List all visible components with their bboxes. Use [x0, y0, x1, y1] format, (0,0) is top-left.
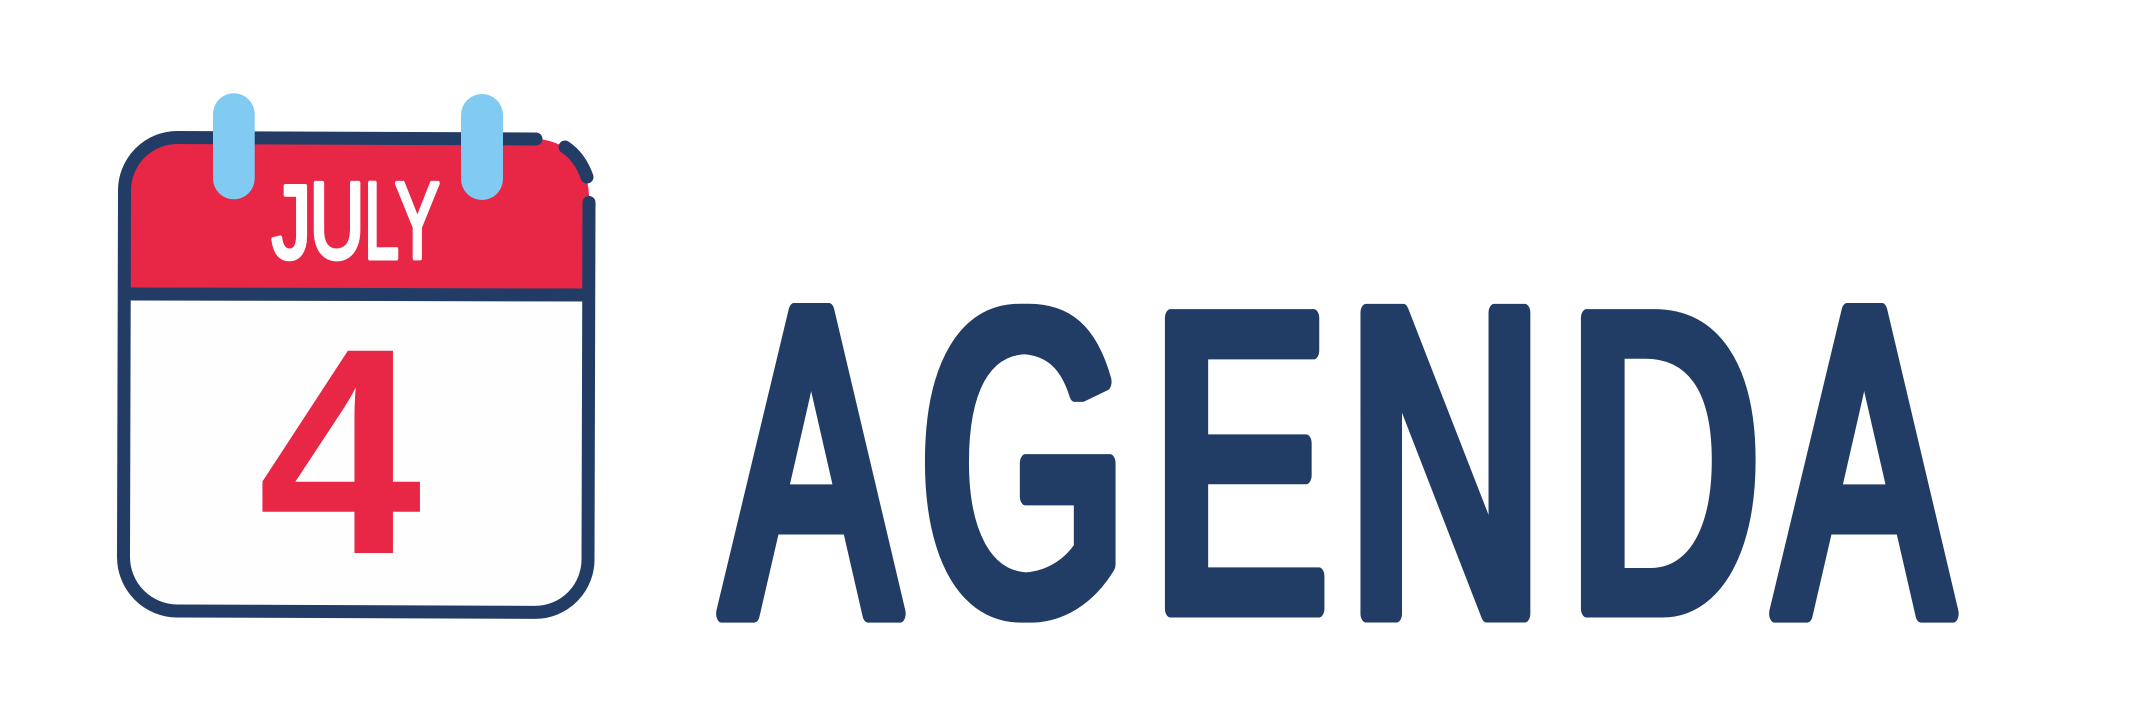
- month label: [266, 160, 440, 291]
- calendar page: [124, 294, 589, 612]
- title: N: [1348, 218, 1543, 706]
- calendar outline: [124, 137, 589, 612]
- date number: 4: [258, 288, 423, 616]
- left binder tab: [213, 93, 255, 199]
- month label: L: [364, 160, 399, 281]
- title: [725, 218, 1951, 707]
- title: D: [1569, 228, 1759, 699]
- title: A: [725, 219, 898, 707]
- month label: U: [310, 160, 365, 281]
- calendar red header: [124, 138, 589, 295]
- month label: J: [266, 167, 315, 291]
- month label: Y: [395, 160, 440, 282]
- title: G: [921, 225, 1126, 700]
- title: A: [1778, 219, 1951, 707]
- icon: calendar: [124, 93, 589, 616]
- title: E: [1153, 228, 1326, 699]
- right binder tab: [461, 94, 503, 200]
